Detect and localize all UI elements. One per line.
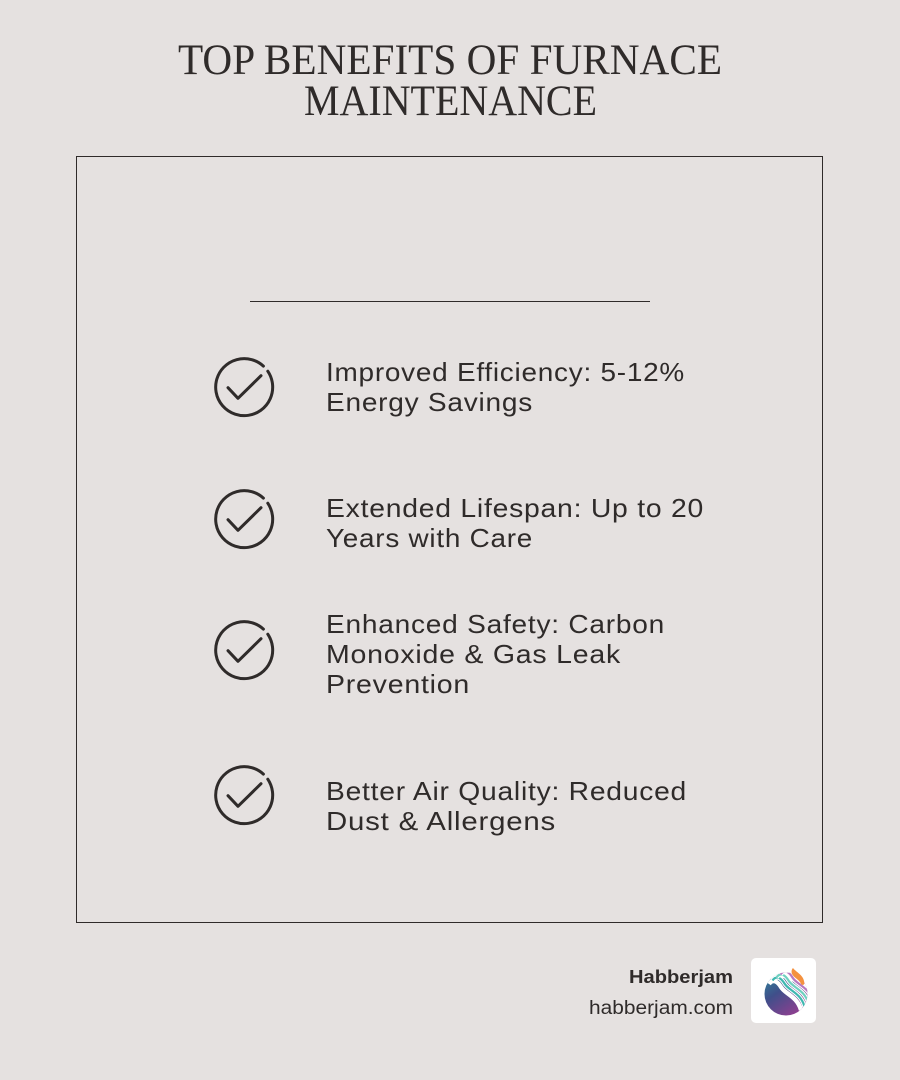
benefit 2 text: Extended Lifespan: Up to 20 xyxy=(326,493,704,523)
benefit 3 text: Prevention xyxy=(326,669,470,699)
benefit 3 text: Enhanced Safety: Carbon xyxy=(326,609,665,639)
icon: check circle 1 xyxy=(216,359,273,416)
icon: check circle 4 xyxy=(216,767,273,824)
benefit 3 text xyxy=(326,609,665,699)
icon: check circle 3 xyxy=(216,622,273,679)
benefit 4 text: Dust & Allergens xyxy=(326,806,556,836)
title: MAINTENANCE xyxy=(304,78,597,125)
benefit 4 text: Better Air Quality: Reduced xyxy=(326,776,687,806)
benefit 2 text xyxy=(326,493,704,553)
title: TOP BENEFITS OF FURNACE xyxy=(178,37,722,84)
benefit 1 text xyxy=(326,357,685,417)
benefit 3 text: Monoxide & Gas Leak xyxy=(326,639,621,669)
benefit 1 text: Improved Efficiency: 5-12% xyxy=(326,357,685,387)
benefit 1 text: Energy Savings xyxy=(326,387,533,417)
brand url: habberjam.com xyxy=(589,998,733,1019)
benefit 2 text: Years with Care xyxy=(326,523,533,553)
brand name: Habberjam xyxy=(629,966,733,987)
title xyxy=(178,37,722,125)
benefit 4 text xyxy=(326,776,687,836)
icon: check circle 2 xyxy=(216,491,273,548)
panel: benefits frame xyxy=(76,156,822,922)
icon: Habberjam logo xyxy=(751,958,816,1023)
